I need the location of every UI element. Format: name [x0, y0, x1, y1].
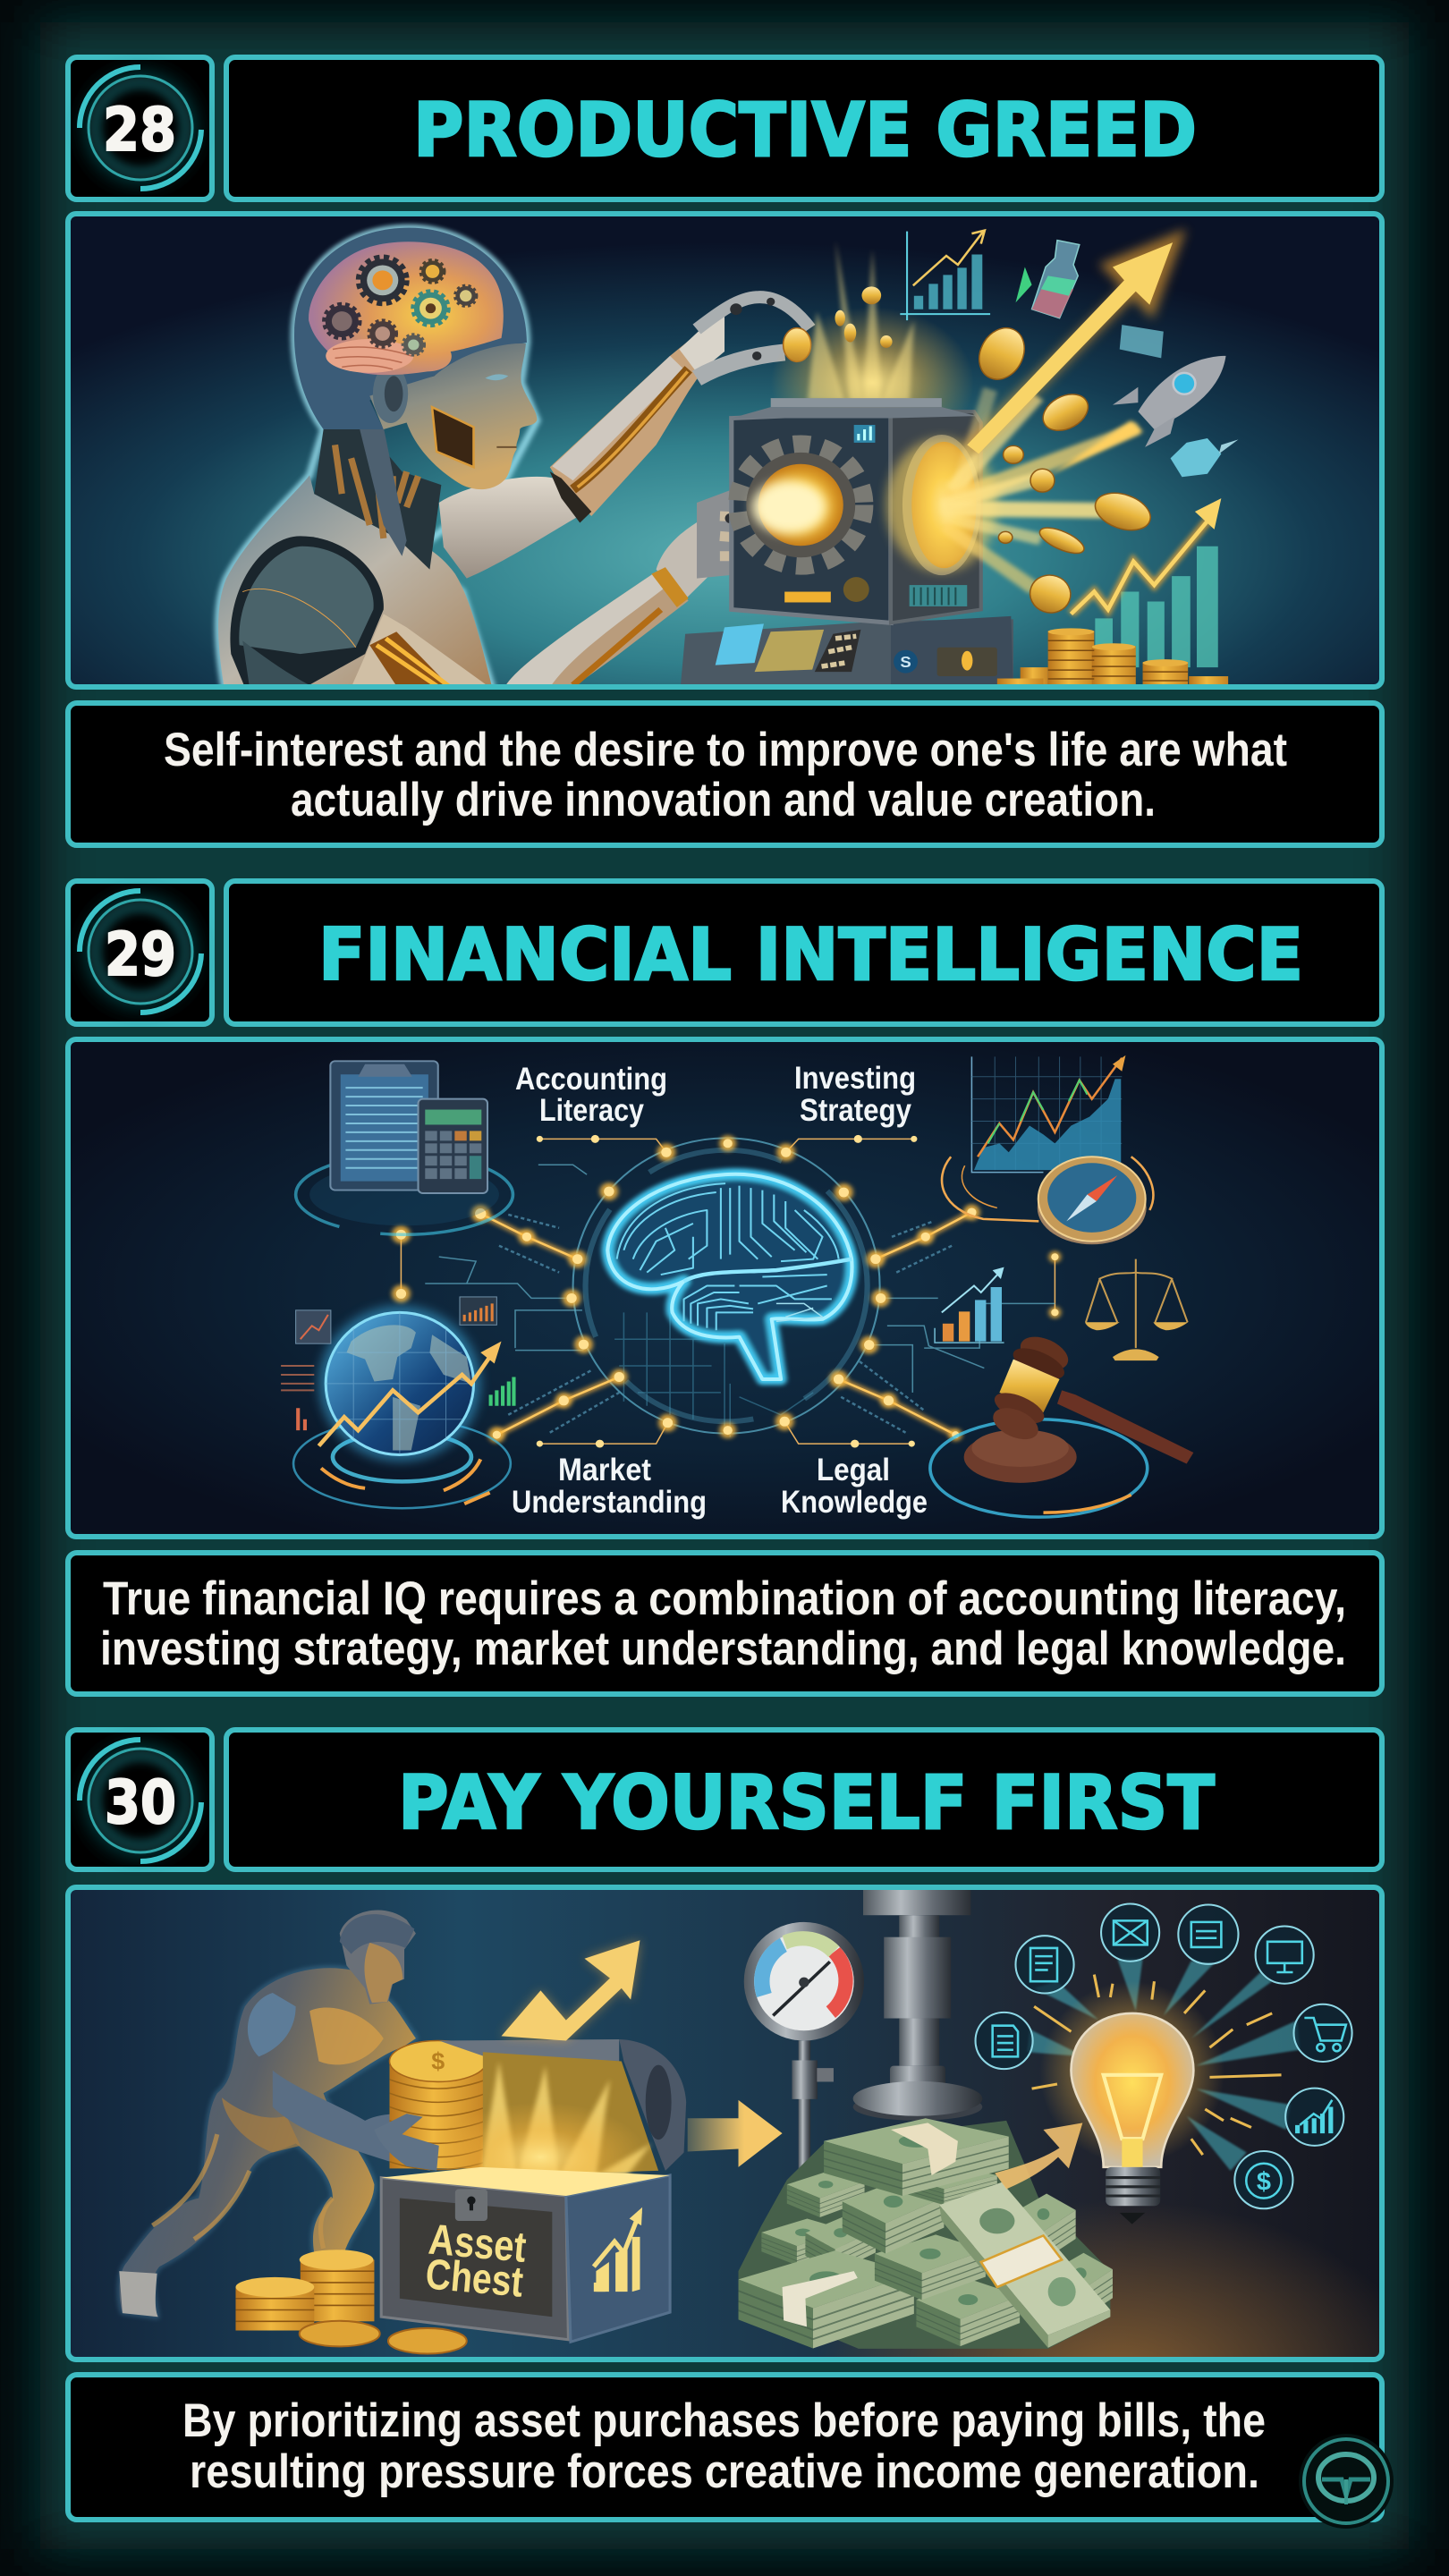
asset chest label	[424, 2216, 528, 2307]
clipboard and calculator: accounting	[296, 1061, 513, 1234]
open treasure chest with gold light	[381, 1940, 686, 2342]
section 28: productive greed	[68, 57, 1382, 845]
gold coin piles on the floor	[235, 2250, 467, 2354]
knowledge labels: Investing	[794, 1061, 916, 1096]
logo badge	[1299, 2434, 1394, 2529]
caption: productive greed	[68, 703, 1382, 845]
big rising gold arrow	[967, 242, 1173, 453]
title bar: financial intelligence	[226, 881, 1382, 1024]
knowledge labels: Legal	[817, 1453, 890, 1487]
bar chart, scales and gavel: legal	[930, 1259, 1193, 1517]
muscular man pushing coins	[119, 1910, 439, 2317]
knowledge labels: Understanding	[512, 1485, 707, 1520]
glowing gold nodes	[392, 1135, 1061, 1448]
rocket	[1048, 356, 1238, 477]
number badge 30: 30	[105, 1767, 176, 1837]
section 29: financial intelligence	[68, 881, 1382, 1694]
knowledge labels: Strategy	[800, 1093, 911, 1128]
caption: pay yourself first: resulting pressure forces creative income generation.	[190, 2445, 1259, 2498]
asset chest label: Asset	[427, 2216, 528, 2272]
bar chart, zigzag arrow and coin stacks	[997, 498, 1228, 687]
title bar: financial intelligence: FINANCIAL INTELLIGENCE	[318, 913, 1303, 996]
robot hands	[697, 297, 811, 579]
flying gold coins	[970, 321, 1156, 618]
title bar: productive greed: PRODUCTIVE GREED	[413, 87, 1197, 174]
knowledge labels	[512, 1061, 928, 1520]
knowledge labels: Knowledge	[781, 1485, 928, 1520]
fan of golden energy rays	[886, 387, 1140, 594]
knowledge labels: Market	[558, 1453, 651, 1487]
asset chest label: Chest	[424, 2250, 525, 2307]
coin machine	[681, 241, 1013, 687]
knowledge labels: Literacy	[539, 1093, 644, 1128]
number badge 30	[68, 1730, 212, 1869]
illustration panel: brain with four knowledge pillars	[68, 1039, 1382, 1537]
title bar: pay yourself first	[226, 1730, 1382, 1869]
neon circuit brain	[607, 1174, 852, 1379]
knowledge labels: Accounting	[515, 1062, 667, 1097]
number badge 29: 29	[105, 919, 176, 989]
glowing idea light bulb with radiating icons	[976, 1903, 1352, 2224]
glowing idea light bulb with radiating icons: $	[1257, 2168, 1271, 2196]
robot figure	[218, 228, 811, 687]
floating bottle, card and small chart	[900, 231, 1164, 358]
globe with rising line: market understanding	[281, 1297, 513, 1508]
section 30: pay yourself first	[68, 1730, 1422, 2558]
illustration panel: asset chest, pressure press and light bulb	[68, 1887, 1422, 2558]
caption: productive greed: Self-interest and the desire to improve one's life are what	[164, 724, 1287, 776]
caption: pay yourself first: By prioritizing asset purchases before paying bills, the	[182, 2394, 1266, 2447]
caption: financial intelligence	[68, 1553, 1382, 1694]
illustration panel: robot feeding coins into machine	[68, 214, 1382, 687]
number badge 28	[68, 57, 212, 199]
stacks of cash under the press	[739, 2118, 1113, 2349]
caption: productive greed: actually drive innovation and value creation.	[291, 774, 1156, 826]
number badge 29	[68, 881, 212, 1024]
coin stack held by the man: $	[431, 2048, 445, 2075]
coin stack held by the man	[374, 2041, 487, 2171]
stock chart and compass: investing	[942, 1055, 1153, 1244]
pressure gauge and press	[688, 1887, 982, 2173]
circuit ring and connectors	[401, 1138, 1055, 1444]
coin machine: S	[900, 652, 911, 671]
brain with gears	[309, 242, 504, 375]
title bar: productive greed	[226, 57, 1382, 199]
caption: pay yourself first	[68, 2375, 1382, 2520]
number badge 28: 28	[103, 95, 176, 165]
title bar: pay yourself first: PAY YOURSELF FIRST	[398, 1759, 1215, 1846]
